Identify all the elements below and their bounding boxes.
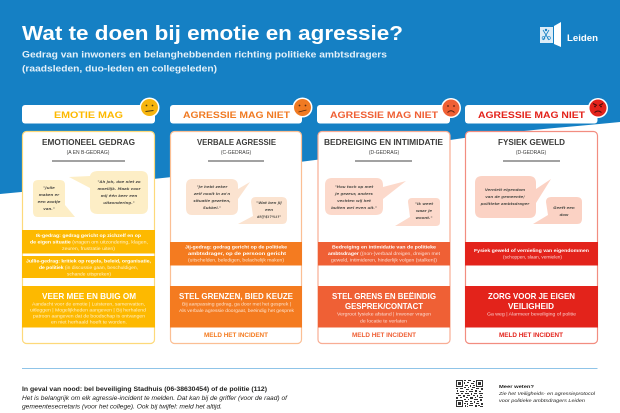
speech bubble: Hou toch op: buiten wel even uit." <box>331 205 377 210</box>
band: ik-gedrag: de eigen situatie (vragen om uitzondering, klagen, <box>30 240 148 244</box>
heading: (A EN B-GEDRAG) <box>67 150 110 156</box>
speech bubble: Julie: "Julie <box>43 185 55 190</box>
band: fysiek geweld <box>465 242 598 266</box>
speech bubble: Ah joh: mij één keer een <box>101 193 137 198</box>
meld het incident: MELD HET INCIDENT <box>204 333 268 339</box>
speech bubble: Wat ben jij: #!@$!?%!!" <box>257 214 281 219</box>
logo: Leiden <box>540 22 598 47</box>
speech bubble: Ik weet <box>395 198 440 226</box>
pill: agressie mag niet <box>465 105 598 124</box>
action: veer mee en buig om: en niet herhaald hoeft te worden. <box>51 320 127 324</box>
speech bubble: Julie: een zootje <box>38 199 61 204</box>
speech bubble: Ah joh: uitzondering." <box>103 200 135 205</box>
speech bubble: Julie: van." <box>43 206 55 211</box>
icon: displeased face <box>292 98 312 118</box>
panel: bedreiging en intimidatie <box>318 132 450 344</box>
footer: meer weten: voor politieke ambtsdragers Leiden <box>499 398 585 404</box>
pill: agressie mag niet <box>170 105 302 124</box>
band: jij-gedrag: (uitschelden, beledigen, belachelijk maken) <box>188 258 285 262</box>
speech bubble: Ah joh <box>69 171 148 214</box>
speech bubble: Ik weet: "Ik weet <box>415 201 433 206</box>
action: veer mee en buig om: Aandacht voor de emotie | Luisteren, samenvatten, <box>32 302 145 306</box>
blue header background <box>0 0 620 194</box>
column 3: bedreiging en intimidatie <box>317 98 461 344</box>
speech bubble: Hou toch op: vechten wij het <box>337 198 371 203</box>
icon: QR code <box>456 380 483 407</box>
band: jullie-gedrag <box>22 256 155 278</box>
action: veer mee en buig om: uitleggen | Mogelijkheden aangeven | Bij herhalend <box>30 308 146 312</box>
band: jullie-gedrag: de politiek (in discussie gaan, beschuldigen, <box>39 265 138 270</box>
speech bubble: Hou toch op: je gezeur, anders <box>334 191 374 196</box>
action: stel grens <box>318 286 450 328</box>
band: ik-gedrag: zeuren, frustratie uiten) <box>62 246 116 251</box>
pill: agressie mag niet: AGRESSIE MAG NIET <box>330 109 438 120</box>
heading <box>42 138 135 162</box>
band: bedreiging: geweld, intimideren, hinderlijk volgen (stalken)) <box>331 258 438 262</box>
band: jullie-gedrag: Jullie-gedrag: kritiek op regels, beleid, organisatie, <box>26 258 151 264</box>
speech bubble: Wat ben jij <box>238 197 287 224</box>
action: stel grens: Vergroot fysieke afstand | Inwoner vragen <box>337 312 431 316</box>
meld het incident: MELD HET INCIDENT <box>352 333 416 339</box>
speech bubble: Wat ben jij: "Wat ben jij <box>256 200 282 205</box>
pill: agressie mag niet: AGRESSIE MAG NIET <box>478 109 585 120</box>
speech bubble: Hou toch op <box>325 178 406 215</box>
action: stel grenzen <box>170 286 302 328</box>
speech bubble: Wat ben jij: een <box>265 207 273 212</box>
speech bubble: Vernielt eigendom: van de gemeente/ <box>485 194 525 199</box>
heading <box>197 138 277 162</box>
band: fysiek geweld: Fysiek geweld of vernieling van eigendommen <box>474 248 589 253</box>
band: bedreiging <box>318 242 450 266</box>
footer: meer weten: Zie het Veiligheids- en agressieprotocol <box>498 391 596 397</box>
band: bedreiging: ambtsdrager ((non-)verbaal dreigen, dreigen met <box>328 251 441 256</box>
heading <box>324 138 444 162</box>
logo: Leiden: Leiden <box>567 33 598 43</box>
action: stel grenzen: STEL GRENZEN, BIED KEUZE <box>179 291 293 301</box>
speech bubble: Je hebt <box>186 179 250 215</box>
speech bubble: Je hebt: zelf nooit in zo'n <box>193 191 230 196</box>
band: ik-gedrag <box>22 230 155 254</box>
footer: emergency text: gemeentesecretaris (voor het college). Ook bij twijfel: meld het altijd. <box>22 404 222 410</box>
band: jullie-gedrag: schande uitspreken) <box>67 272 112 276</box>
speech bubble: Hou toch op: "Hou toch op met <box>335 184 373 189</box>
panel: emotioneel gedrag <box>22 132 155 344</box>
meld het incident: MELD HET INCIDENT <box>499 333 563 339</box>
speech bubble: Ah joh: "Ah joh, doe niet zo <box>97 179 141 184</box>
action: stel grens: GESPREK/CONTACT <box>345 301 424 311</box>
title: Wat te doen bij emotie en agressie? <box>22 22 403 45</box>
action: stel grenzen: Als verbale agressie doorgaat, beëindig het gesprek <box>179 308 295 313</box>
pill: agressie mag niet: AGRESSIE MAG NIET <box>183 109 290 120</box>
heading: (D-GEDRAG) <box>516 150 546 156</box>
speech bubble: Vernielt eigendom <box>475 176 551 218</box>
band: ik-gedrag: Ik-gedrag: gedrag gericht op zichzelf en op <box>36 233 141 238</box>
speech bubble: Vernielt eigendom: politieke ambtsdrager <box>480 201 530 206</box>
band: jij-gedrag: Jij-gedrag: gedrag gericht op de politieke <box>185 244 288 250</box>
icon: angry face <box>588 98 608 118</box>
action: zorg voor je eigen veiligheid <box>465 286 598 328</box>
band: bedreiging: Bedreiging en intimidatie van de politieke <box>332 244 437 250</box>
pill: emotie mag: EMOTIE MAG <box>54 109 123 120</box>
action: stel grenzen: Bij aanpassing gedrag, ga door met het gesprek | <box>182 302 291 306</box>
column 1: emotie mag <box>22 98 160 344</box>
band: jij-gedrag: ambtsdrager, op de persoon gericht <box>188 251 287 256</box>
speech bubble: Geeft een dow <box>533 197 582 224</box>
icon: sad face <box>441 98 461 118</box>
action: zorg voor je eigen veiligheid: VEILIGHEID <box>508 301 554 311</box>
action: veer mee en buig om: patroon aangeven dat de boodschap is ontvangen <box>33 314 145 318</box>
footer: meer weten: Meer weten? <box>499 384 534 390</box>
panel: fysiek geweld <box>465 132 598 344</box>
subtitle: (raadsleden, duo-leden en collegeleden) <box>22 64 217 74</box>
band: jij-gedrag <box>170 242 302 266</box>
speech bubble: Ik weet: woont." <box>415 215 433 220</box>
heading: EMOTIONEEL GEDRAG <box>42 138 135 147</box>
speech bubble: Je hebt: Sukkel." <box>203 205 221 210</box>
heading: FYSIEK GEWELD <box>498 138 565 147</box>
speech bubble: Vernielt eigendom: Vernielt eigendom <box>485 187 525 192</box>
subtitle: Gedrag van inwoners en belanghebbenden richting politieke ambtsdragers <box>22 50 387 60</box>
action: veer mee en buig om <box>22 286 155 328</box>
action: zorg voor je eigen veiligheid: ZORG VOOR JE EIGEN <box>488 291 575 301</box>
footer: emergency text: Het is belangrijk om elk agressie-incident te melden. Dat kan bij de griffer (voor de raad) of <box>22 396 288 402</box>
footer: emergency text <box>22 387 288 410</box>
panel: verbale agressie <box>170 132 302 344</box>
footer: meer weten <box>498 384 596 404</box>
speech bubble: Julie: maken er <box>39 192 60 197</box>
column 4: fysiek geweld <box>465 98 608 344</box>
heading <box>498 138 565 162</box>
speech bubble: Geeft een dow: Geeft een <box>553 205 575 210</box>
band: fysiek geweld: (schoppen, slaan, vernielen) <box>503 254 563 260</box>
speech bubble: Julie <box>33 180 75 217</box>
speech bubble: Geeft een dow: dow <box>559 212 569 217</box>
action: stel grens: STEL GRENS EN BEËINDIG <box>332 291 436 301</box>
subtitle <box>22 50 387 74</box>
heading: (C-GEDRAG) <box>221 150 251 156</box>
pill: agressie mag niet <box>317 105 450 124</box>
action: stel grens: de locatie te verlaten <box>360 318 407 324</box>
speech bubble: Ah joh: moeilijk. Maak voor <box>98 186 142 191</box>
speech bubble: Je hebt: "Je hebt zeker <box>197 184 228 189</box>
action: zorg voor je eigen veiligheid: Ga weg | Alarmeer beveiliging of politie <box>487 312 576 316</box>
icon: neutral face <box>140 98 160 118</box>
footer: emergency text: In geval van nood: bel beveiliging Stadhuis (06-38630454) of de politie (112) <box>22 387 267 393</box>
column 2: verbale agressie <box>170 98 312 344</box>
action: veer mee en buig om: VEER MEE EN BUIG OM <box>42 291 136 301</box>
pill: emotie mag <box>22 105 155 124</box>
speech bubble: Je hebt: situatie gezeten, <box>193 198 231 203</box>
heading: BEDREIGING EN INTIMIDATIE <box>324 138 444 147</box>
heading: VERBALE AGRESSIE <box>197 138 277 147</box>
speech bubble: Ik weet: waar je <box>416 208 432 213</box>
heading: (D-GEDRAG) <box>369 150 399 156</box>
